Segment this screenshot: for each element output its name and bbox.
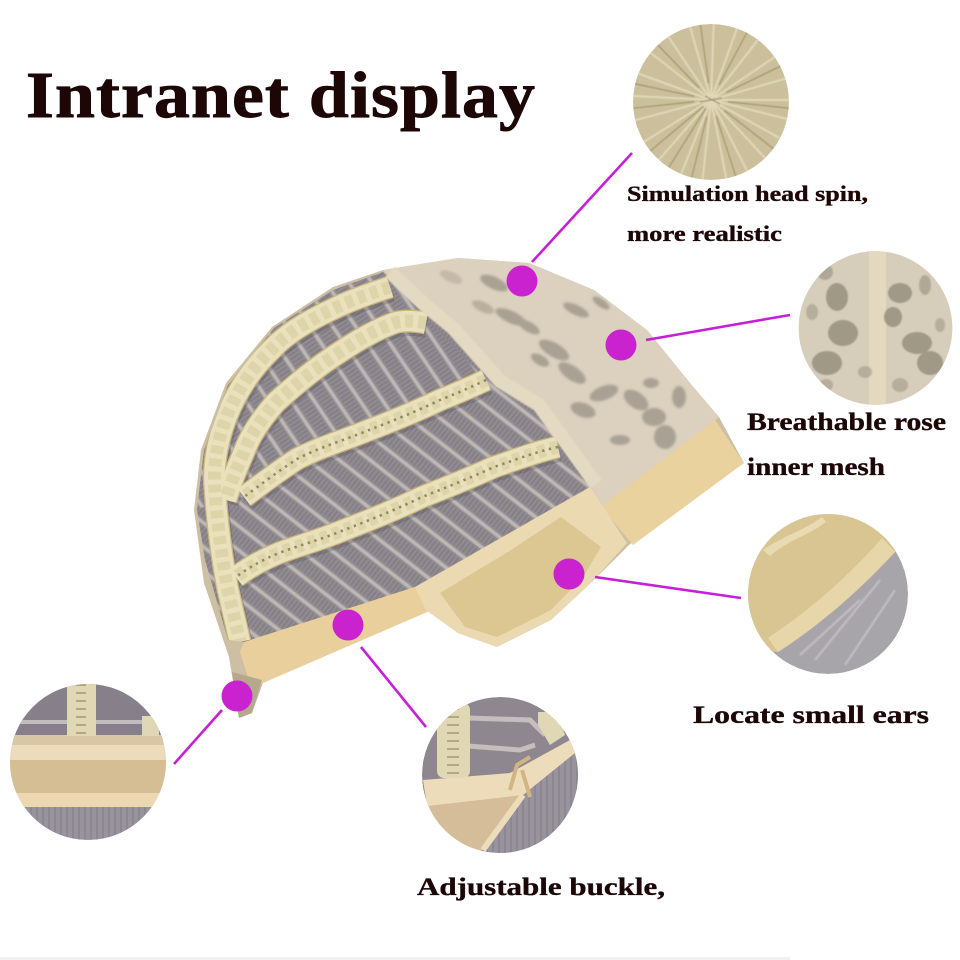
lace mesh crown [383,258,719,507]
detail circle: adjustable buckle [422,697,578,853]
label: simulation head spin: Simulation head spin, [627,181,868,206]
label: adjustable buckle: Adjustable buckle, [417,874,665,901]
lace strips [214,287,559,645]
lace seam [390,272,596,484]
right side band [601,420,744,545]
strip shadows [215,290,559,645]
label: locate small ears: Locate small ears [693,702,929,729]
detail circle: head spin [631,20,791,180]
elastic band [240,587,432,690]
detail circle: band close-up [10,684,166,840]
cap tab shadow [232,672,262,718]
cap outer shell [194,258,744,718]
bottom edge strip [0,957,790,960]
title: Intranet display [26,59,536,132]
callout dot and line: band detail [174,680,252,764]
wig cap [180,250,744,718]
label: simulation head spin: more realistic [627,221,782,246]
detail circle: rose mesh [798,250,952,406]
callout dot and line: rose mesh [606,315,790,360]
grey hair netting [197,272,590,642]
label: breathable rose inner mesh: inner mesh [747,454,885,481]
callout dot and line: head spin [506,153,632,296]
ear tab [415,487,627,647]
label: simulation head spin [627,181,868,246]
label: breathable rose inner mesh: Breathable rose [747,409,946,436]
detail circle: ear [745,510,915,674]
callout dot and line: ear [554,558,741,598]
callout dot and line: buckle [332,610,426,727]
strip bodies [214,287,558,642]
label: breathable rose inner mesh [747,409,946,481]
